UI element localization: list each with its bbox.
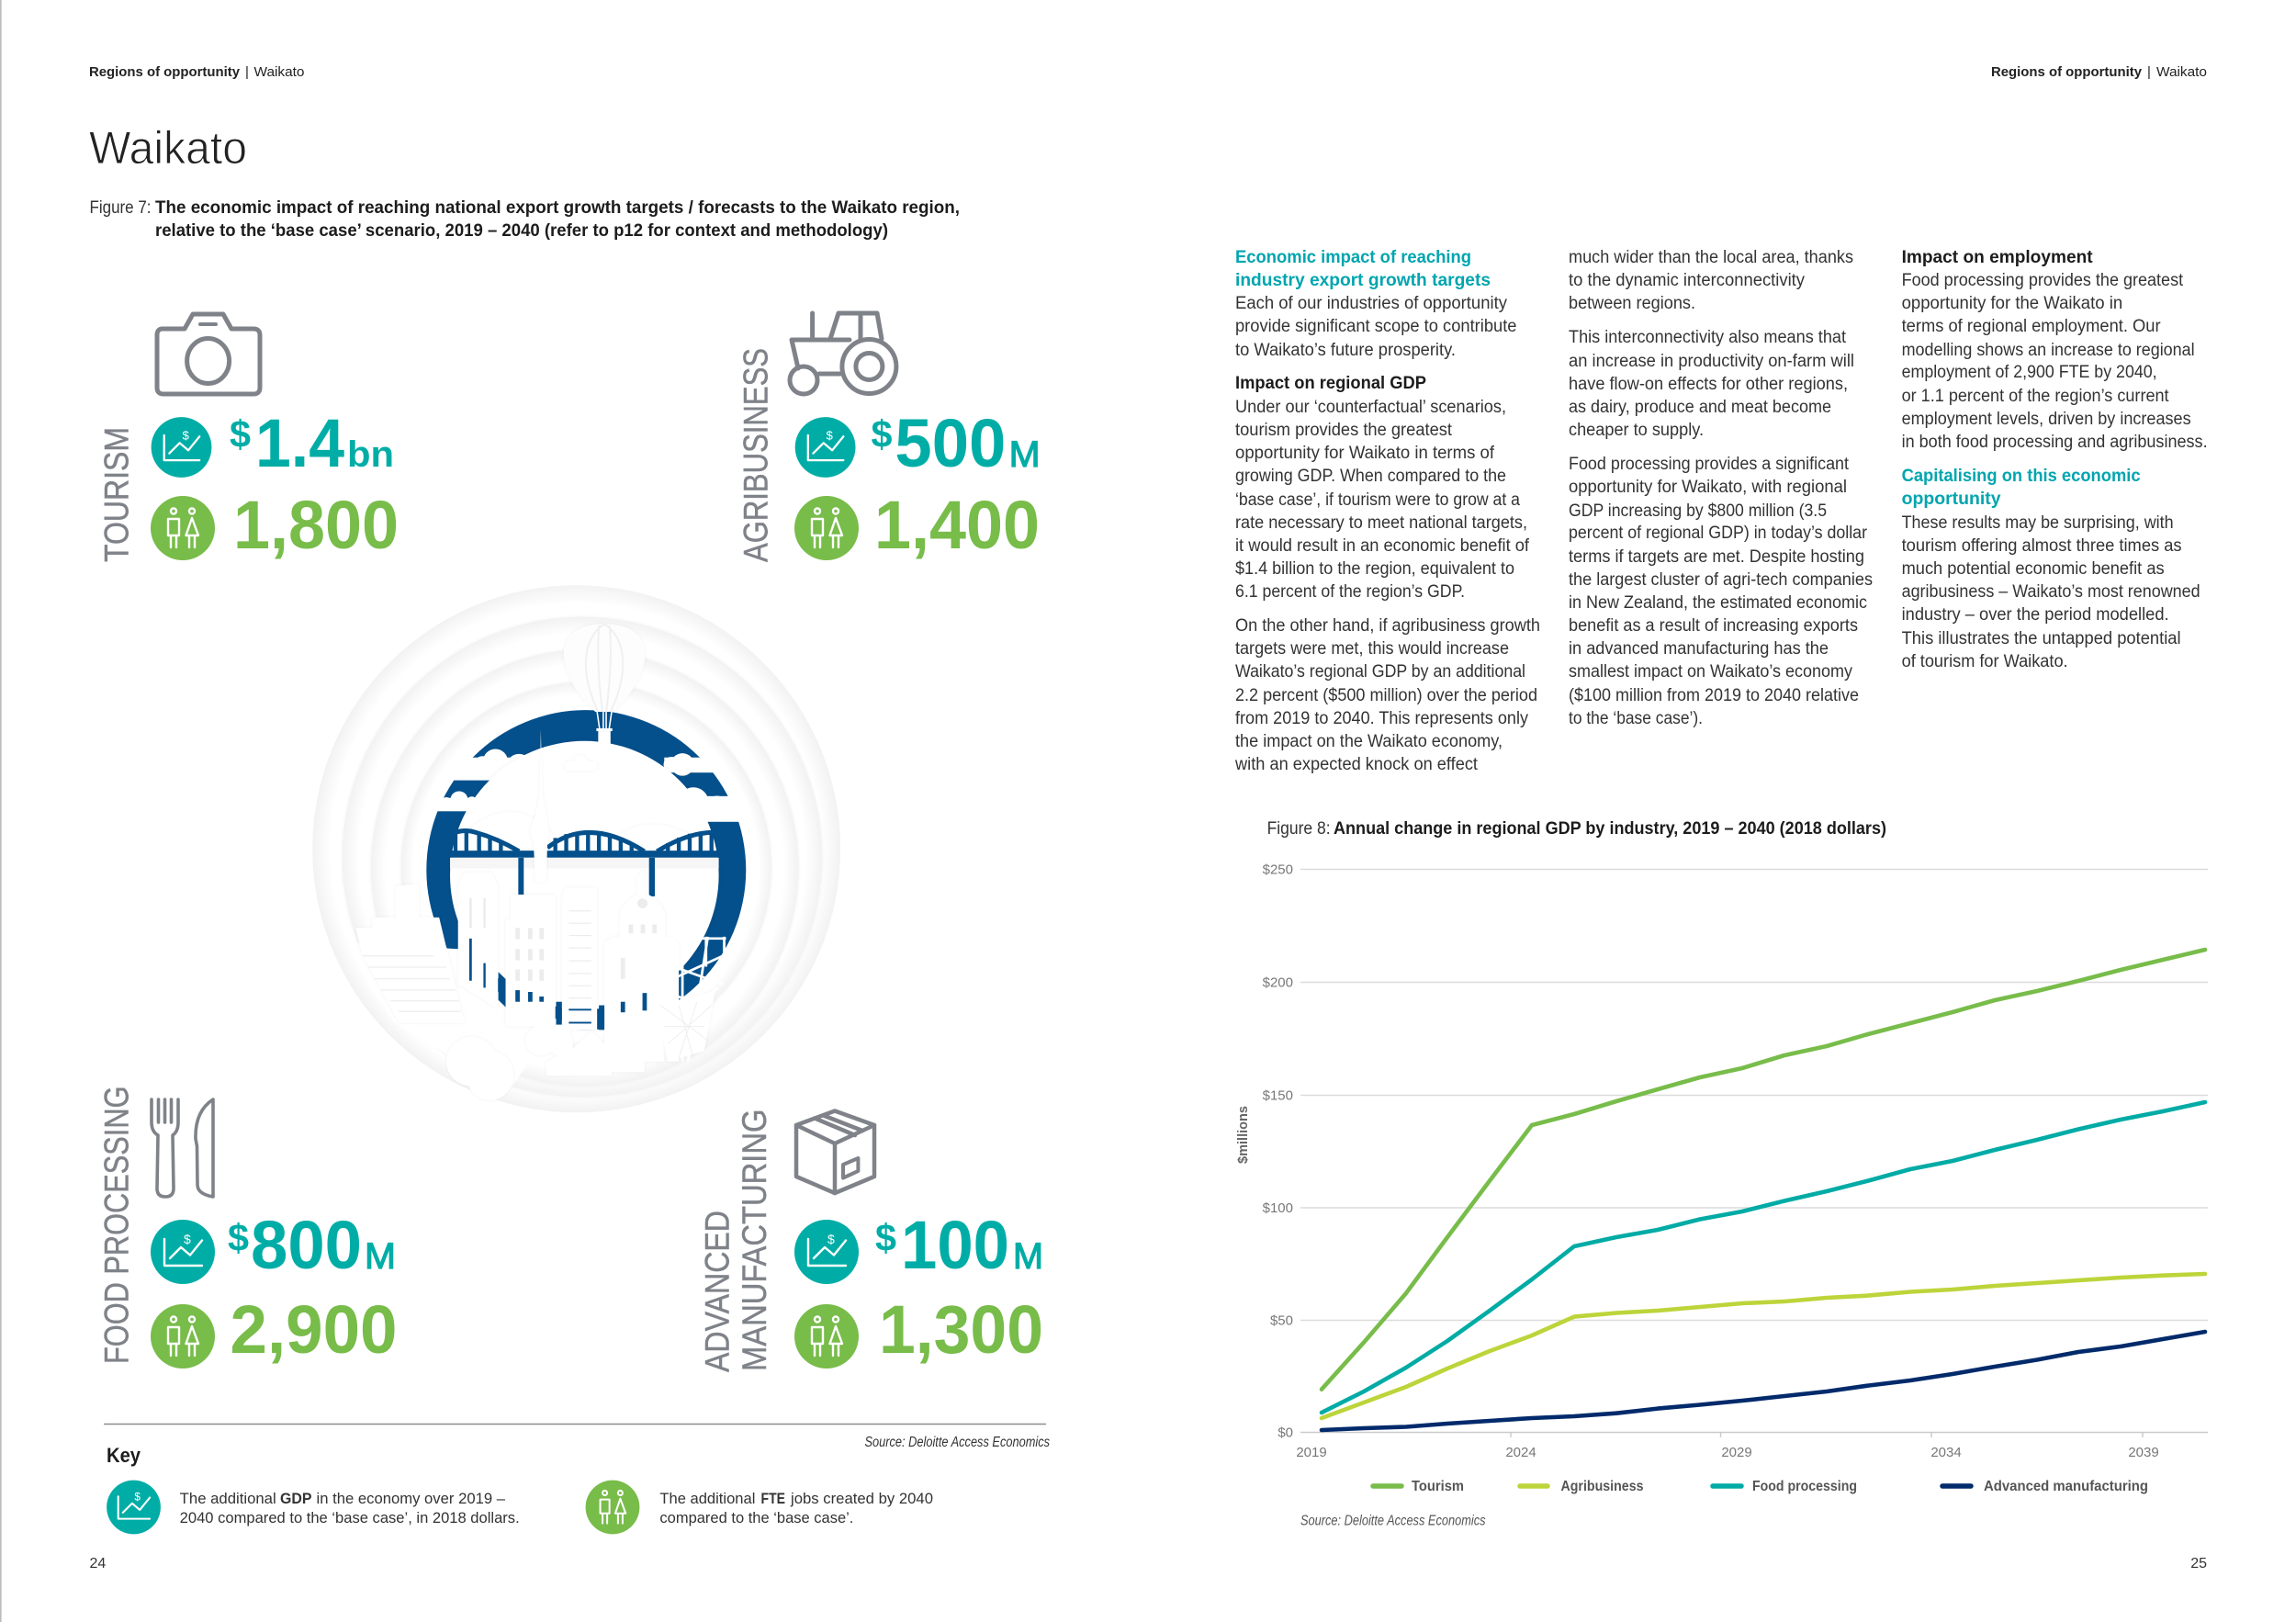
x-axis labels: 2029 <box>1721 1445 1752 1460</box>
page header: right: Regions of opportunity <box>1991 64 2143 80</box>
icon: GDP: $ <box>182 429 189 443</box>
key text: FTE: compared to the ‘base case’. <box>659 1510 853 1526</box>
icon: jobs <box>151 496 215 560</box>
inner hill circle <box>450 741 719 1009</box>
icon: jobs <box>151 1304 215 1369</box>
key text: GDP: GDP <box>280 1491 312 1507</box>
paragraph: food processing: ($100 million from 2019 to 2040 relative <box>1569 686 1859 705</box>
icon: fork and knife <box>152 1099 213 1197</box>
paragraph: employment: opportunity for the Waikato in <box>1902 294 2122 313</box>
y-axis labels: $50 <box>1270 1313 1293 1328</box>
x-axis labels: 2039 <box>2128 1445 2159 1460</box>
paragraph: interconnectivity: as dairy, produce and meat become <box>1569 398 1831 417</box>
paragraph: food processing: percent of regional GDP) in today’s dollar <box>1569 524 1868 543</box>
paragraph: capitalising: much potential economic benefit as <box>1902 559 2165 579</box>
paragraph: food processing: GDP increasing by $800 million (3.5 <box>1569 501 1827 521</box>
page number 25: 25 <box>2190 1556 2207 1571</box>
paragraph: counterfactual: tourism provides the greatest <box>1235 421 1453 440</box>
paragraph: counterfactual: Under our ‘counterfactual’ scenarios, <box>1235 398 1506 417</box>
key text: GDP: The additional <box>180 1491 276 1507</box>
paragraph: agribusiness: On the other hand, if agribusiness growth <box>1235 616 1540 636</box>
heading: capitalising <box>1902 467 2141 509</box>
icon: tractor <box>790 313 896 394</box>
key text: FTE: The additional <box>659 1491 755 1507</box>
paragraph: intro: provide significant scope to contribute <box>1235 317 1517 336</box>
paragraph: food processing: the largest cluster of agri-tech companies <box>1569 570 1873 590</box>
panel: advanced manufacturing <box>698 1109 1043 1372</box>
paragraph: food processing: Food processing provides a significant <box>1569 455 1850 474</box>
icon: GDP: $ <box>184 1232 191 1246</box>
figure 8 caption: Annual change in regional GDP by industry, 2019 – 2040 (2018 dollars) <box>1334 819 1886 839</box>
paragraph: intro: to Waikato’s future prosperity. <box>1235 341 1456 360</box>
value: jobs: 1,300 <box>879 1291 1043 1368</box>
paragraph: counterfactual <box>1235 398 1530 602</box>
paragraph: employment: in both food processing and agribusiness. <box>1902 433 2208 452</box>
text column 2 <box>1569 248 1873 728</box>
paragraph: counterfactual: ‘base case’, if tourism were to grow at a <box>1235 490 1520 510</box>
source: figure 8: Source: Deloitte Access Economics <box>1300 1514 1486 1528</box>
x-axis labels: 2034 <box>1930 1445 1962 1460</box>
paragraph: employment <box>1902 271 2208 452</box>
icon: jobs <box>794 1304 859 1369</box>
y-axis title: $millions <box>1235 1106 1251 1164</box>
icon: GDP: $ <box>134 1491 141 1503</box>
heading: economic impact: industry export growth targets <box>1235 271 1491 290</box>
icon: jobs <box>794 496 859 560</box>
page header: right: | <box>2147 64 2151 80</box>
key <box>107 1444 933 1534</box>
paragraph: agribusiness: targets were met, this would increase <box>1235 639 1509 659</box>
value: GDP: 800 <box>251 1207 362 1283</box>
key text: FTE <box>659 1491 933 1526</box>
paragraph: counterfactual: it would result in an economic benefit of <box>1235 536 1530 556</box>
key text: GDP: in the economy over 2019 – <box>316 1491 506 1507</box>
paragraph: food processing: in New Zealand, the estimated economic <box>1569 593 1867 613</box>
y-axis labels: $150 <box>1263 1087 1293 1104</box>
chart legend: Food processing <box>1752 1479 1857 1494</box>
figure 7 caption: Figure 7: <box>90 198 151 218</box>
icon: GDP <box>795 417 856 478</box>
key text: FTE: FTE <box>760 1491 785 1507</box>
page header: left: | <box>245 64 249 80</box>
balloon <box>564 624 645 712</box>
paragraph: agribusiness: 2.2 percent ($500 million) over the period <box>1235 686 1537 705</box>
value: jobs: 1,400 <box>874 487 1040 563</box>
panel: tourism <box>97 314 399 563</box>
label: agribusiness: AGRIBUSINESS <box>737 348 775 562</box>
value: GDP <box>875 1207 1043 1283</box>
page number 24: 24 <box>90 1556 106 1571</box>
heading: economic impact: Economic impact of reaching <box>1235 248 1471 267</box>
key heading: Key <box>107 1444 141 1467</box>
chart legend: Tourism <box>1412 1479 1464 1494</box>
x-axis labels: 2024 <box>1505 1445 1536 1460</box>
icon: GDP: $ <box>827 429 834 443</box>
value: jobs: 1,800 <box>233 487 399 563</box>
paragraph: capitalising: industry – over the period modelled. <box>1902 605 2169 625</box>
paragraph: capitalising: tourism offering almost three times as <box>1902 536 2182 556</box>
paragraph: counterfactual: opportunity for Waikato in terms of <box>1235 444 1495 463</box>
value: GDP <box>228 1207 396 1283</box>
icon: GDP <box>794 1220 859 1284</box>
paragraph: intro <box>1235 294 1517 360</box>
label: advanced manufacturing: ADVANCED <box>698 1211 736 1372</box>
value: GDP: $ <box>228 1216 249 1259</box>
icon: GDP: $ <box>827 1232 835 1246</box>
paragraph: food processing: in advanced manufacturing has the <box>1569 639 1829 659</box>
value: GDP: 1.4 <box>255 405 344 481</box>
value: GDP: bn <box>347 434 394 475</box>
line: food processing <box>1322 1102 2205 1413</box>
label: advanced manufacturing: MANUFACTURING <box>736 1109 773 1371</box>
line: advanced manufacturing <box>1322 1332 2205 1430</box>
paragraph: employment: Food processing provides the greatest <box>1902 271 2184 290</box>
lower trees and houses <box>446 1037 497 1087</box>
stadium lattice <box>641 935 726 1062</box>
paragraph: capitalising <box>1902 513 2200 671</box>
text column 3 <box>1902 248 2208 671</box>
chart legend: Agribusiness <box>1561 1479 1644 1494</box>
paragraph: counterfactual: $1.4 billion to the region, equivalent to <box>1235 559 1514 579</box>
paragraph: continued <box>1569 248 1853 313</box>
page header: left: Waikato <box>253 64 305 80</box>
buildings <box>355 729 715 1100</box>
paragraph: food processing: to the ‘base case’). <box>1569 709 1703 728</box>
figure 7 caption: The economic impact of reaching national export growth targets / forecasts to the Waikato region, <box>155 198 960 218</box>
key text: GDP <box>180 1491 520 1526</box>
blue sky <box>426 710 746 1030</box>
page header: right: Waikato <box>2156 64 2207 80</box>
paragraph: employment: terms of regional employment. Our <box>1902 317 2161 336</box>
label: tourism: TOURISM <box>97 427 136 562</box>
paragraph: food processing <box>1569 455 1873 728</box>
paragraph: counterfactual: 6.1 percent of the region’s GDP. <box>1235 582 1465 602</box>
paragraph: interconnectivity: have flow-on effects for other regions, <box>1569 375 1848 394</box>
figure 7 caption <box>90 198 960 241</box>
icon: box <box>796 1111 874 1193</box>
lower-left white cover <box>355 943 542 1087</box>
icon: jobs <box>586 1481 639 1534</box>
paragraph: capitalising: These results may be surprising, with <box>1902 513 2174 533</box>
value: GDP <box>230 405 394 481</box>
chart legend: Advanced manufacturing <box>1984 1479 2148 1494</box>
panel: agribusiness <box>737 313 1041 563</box>
paragraph: intro: Each of our industries of opportunity <box>1235 294 1507 313</box>
paragraph: continued: much wider than the local area, thanks <box>1569 248 1853 267</box>
paragraph: counterfactual: growing GDP. When compared to the <box>1235 467 1506 486</box>
clouds over sky <box>454 749 713 781</box>
paragraph: interconnectivity: an increase in productivity on-farm will <box>1569 352 1854 371</box>
paragraph: food processing: smallest impact on Waikato’s economy <box>1569 662 1852 681</box>
title: Waikato <box>89 122 247 174</box>
heading: capitalising: opportunity <box>1902 490 2001 509</box>
icon: GDP <box>151 1220 215 1284</box>
y-axis labels: $0 <box>1277 1425 1293 1440</box>
label: food processing: FOOD PROCESSING <box>97 1086 136 1364</box>
value: GDP: $ <box>871 412 893 456</box>
icon: GDP <box>152 417 211 478</box>
page header: left: Regions of opportunity <box>89 64 241 80</box>
paragraph: food processing: opportunity for Waikato, with regional <box>1569 478 1847 497</box>
value: GDP: 100 <box>901 1207 1009 1283</box>
heading: impact on employment: Impact on employment <box>1902 248 2093 267</box>
key text: FTE: jobs created by 2040 <box>790 1491 933 1507</box>
paragraph: interconnectivity: cheaper to supply. <box>1569 421 1704 440</box>
label: advanced manufacturing <box>698 1109 773 1372</box>
line: tourism <box>1322 950 2205 1390</box>
value: GDP: 500 <box>895 405 1006 481</box>
paragraph: agribusiness: from 2019 to 2040. This represents only <box>1235 709 1528 728</box>
text column 1 <box>1234 248 1540 774</box>
figure 8 caption: Figure 8: <box>1267 819 1331 839</box>
paragraph: capitalising: of tourism for Waikato. <box>1902 652 2068 671</box>
chart legend <box>1373 1479 2148 1494</box>
y-axis labels: $100 <box>1263 1200 1293 1216</box>
paragraph: food processing: benefit as a result of increasing exports <box>1569 616 1858 636</box>
paragraph: continued: to the dynamic interconnectivity <box>1569 271 1805 290</box>
paragraph: capitalising: agribusiness – Waikato’s most renowned <box>1902 582 2200 602</box>
paragraph: agribusiness: the impact on the Waikato economy, <box>1235 732 1503 751</box>
value: GDP <box>871 405 1041 481</box>
value: GDP: M <box>1009 434 1041 475</box>
heading: capitalising: Capitalising on this economic <box>1902 467 2141 486</box>
paragraph: agribusiness: with an expected knock on effect <box>1234 755 1479 774</box>
y-axis labels <box>1263 862 1293 1440</box>
heading: economic impact <box>1235 248 1491 290</box>
heading: impact on regional GDP: Impact on regional GDP <box>1235 374 1426 393</box>
value: GDP: $ <box>875 1216 896 1259</box>
value: GDP: M <box>365 1236 396 1277</box>
paragraph: interconnectivity <box>1569 328 1854 440</box>
paragraph: continued: between regions. <box>1569 294 1695 313</box>
paragraph: employment: or 1.1 percent of the region’s current <box>1902 387 2169 406</box>
illustration: papercut Waikato cityscape <box>312 585 840 1112</box>
figure 7 caption: relative to the ‘base case’ scenario, 2019 – 2040 (refer to p12 for context and methodology) <box>155 221 888 241</box>
line: agribusiness <box>1322 1274 2205 1418</box>
value: jobs: 2,900 <box>230 1291 397 1368</box>
stadium <box>641 939 679 1062</box>
bridge <box>454 831 717 852</box>
y-axis labels: $200 <box>1263 975 1293 990</box>
source: figure 7: Source: Deloitte Access Economics <box>865 1435 1050 1450</box>
paragraph: employment: employment of 2,900 FTE by 2040, <box>1902 363 2157 382</box>
y-axis labels: $250 <box>1263 862 1293 878</box>
windows <box>363 898 657 1012</box>
icon: camera <box>157 314 260 394</box>
paragraph: employment: employment levels, driven by increases <box>1902 410 2191 429</box>
icon: GDP <box>107 1481 161 1534</box>
paragraph: interconnectivity: This interconnectivity also means that <box>1569 328 1847 347</box>
line chart: annual change in regional GDP <box>1235 862 2208 1460</box>
value: GDP: M <box>1013 1236 1043 1277</box>
paragraph: agribusiness <box>1234 616 1540 774</box>
value: GDP: $ <box>230 412 251 456</box>
paragraph: agribusiness: Waikato’s regional GDP by an additional <box>1235 662 1525 681</box>
x-axis labels: 2019 <box>1296 1445 1327 1460</box>
paragraph: counterfactual: rate necessary to meet national targets, <box>1235 513 1527 533</box>
paragraph: food processing: terms if targets are met. Despite hosting <box>1569 547 1864 567</box>
panel: food processing <box>97 1086 397 1369</box>
key text: GDP: 2040 compared to the ‘base case’, in 2018 dollars. <box>180 1510 520 1526</box>
paragraph: capitalising: This illustrates the untapped potential <box>1902 629 2181 648</box>
x-axis labels <box>1296 1445 2159 1460</box>
paragraph: employment: modelling shows an increase to regional <box>1902 341 2195 360</box>
